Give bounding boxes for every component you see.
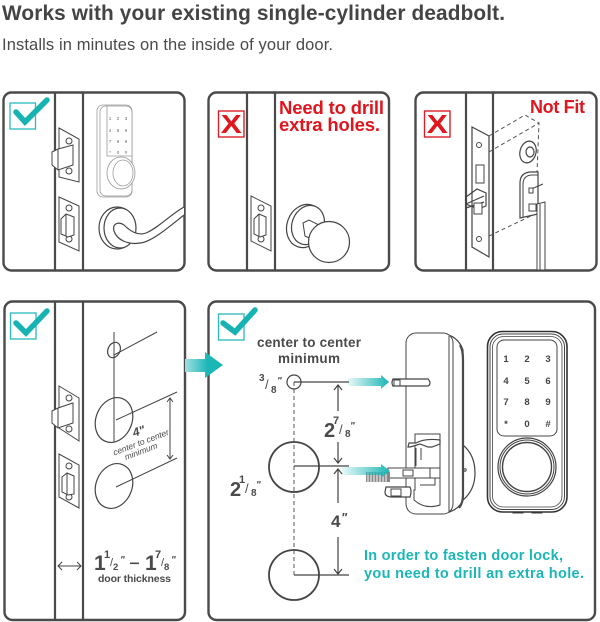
dimension labels: " xyxy=(277,376,282,387)
smart lock front: * xyxy=(504,419,508,430)
center to center heading: minimum xyxy=(278,351,340,366)
dimension labels: 7 xyxy=(333,415,339,427)
dimension labels: 8 xyxy=(251,488,257,499)
smart lock illustration: 5 xyxy=(117,128,120,133)
smart lock front: 1 xyxy=(503,354,509,365)
smart lock illustration: 6 xyxy=(125,128,128,133)
thickness value: 1 xyxy=(145,552,157,575)
dimension labels: " xyxy=(256,480,261,491)
icon: teal check xyxy=(10,311,47,339)
rotated spacing label: center to center xyxy=(112,427,171,457)
icon: teal check xyxy=(218,310,255,340)
lever handle xyxy=(99,207,184,249)
smart lock illustration: 2 xyxy=(117,116,120,121)
teal instruction text: In order to fasten door lock, xyxy=(364,548,563,564)
arrow: to detail panel xyxy=(185,352,223,378)
thickness arrow xyxy=(58,562,81,570)
smart lock illustration: 0 xyxy=(117,150,120,155)
dimension labels: 4 xyxy=(331,512,341,531)
center to center heading: center to center xyxy=(257,335,362,350)
dimension labels: " xyxy=(350,421,355,432)
icon: red x xyxy=(218,109,244,139)
subtitle: Installs in minutes on the inside of your door. xyxy=(2,36,333,54)
teal instruction text: you need to drill an extra hole. xyxy=(364,566,584,582)
icon: red x xyxy=(424,109,450,139)
dimension arrows xyxy=(334,385,342,574)
smart lock front: # xyxy=(545,419,551,430)
rotated spacing label: 4" xyxy=(130,423,147,440)
dimension labels: 8 xyxy=(271,385,277,396)
thickness value: 1 xyxy=(104,549,110,561)
panel: door thickness and hole spacing xyxy=(4,301,185,620)
hole diagram xyxy=(89,332,177,514)
smart lock front xyxy=(488,332,567,513)
dimension labels: / xyxy=(339,422,343,437)
smart lock illustration: 3 xyxy=(125,116,128,121)
smart lock front: 8 xyxy=(524,397,530,408)
warning text xyxy=(279,97,384,135)
hole spacing diagram xyxy=(269,375,349,600)
smart lock front: 0 xyxy=(524,419,530,430)
arrow: center hole xyxy=(342,464,390,478)
dimension labels: " xyxy=(341,510,348,525)
panel: mortise lock not fit xyxy=(416,92,596,270)
smart lock front: 7 xyxy=(503,397,509,408)
dimension labels: 1 xyxy=(239,474,245,486)
dimension labels: 8 xyxy=(345,429,351,440)
thickness value: " xyxy=(171,555,176,566)
thickness value xyxy=(94,549,176,575)
smart lock illustration: 7 xyxy=(109,139,112,144)
smart lock illustration: 4 xyxy=(109,128,112,133)
warning text: extra holes. xyxy=(279,114,380,135)
title: Works with your existing single-cylinder deadbolt. xyxy=(2,2,505,25)
panel: knob needs extra holes xyxy=(208,92,389,270)
smart lock front: 2 xyxy=(524,354,530,365)
icon: red x: X xyxy=(221,109,243,139)
smart lock front: 9 xyxy=(545,397,551,408)
panel: drilling detail xyxy=(208,302,595,620)
icon: teal check xyxy=(10,100,47,129)
smart lock front: 4 xyxy=(503,376,509,387)
dimension labels: / xyxy=(245,481,249,496)
dimension labels xyxy=(230,373,355,531)
thickness value: 8 xyxy=(164,562,169,573)
thickness value: 2 xyxy=(113,562,118,573)
smart lock front: 5 xyxy=(524,376,530,387)
smart lock illustration: 9 xyxy=(125,139,128,144)
thickness value: / xyxy=(161,557,165,569)
door edge hardware xyxy=(52,386,79,508)
thickness value: 1 xyxy=(94,552,106,575)
center to center heading xyxy=(257,335,362,366)
lock back side xyxy=(385,333,475,514)
warning text: Need to drill xyxy=(279,97,384,118)
not fit label: Not Fit xyxy=(530,97,585,117)
icon: red x: X xyxy=(427,109,449,139)
thickness value: / xyxy=(110,557,114,569)
smart lock illustration: 1 xyxy=(109,116,112,121)
dimension labels: / xyxy=(265,377,269,392)
door knob xyxy=(281,199,350,262)
panel: compatible lever and deadbolt xyxy=(4,92,184,270)
rotated spacing label: minimum xyxy=(123,440,159,462)
teal instruction text xyxy=(364,548,584,582)
mortise lock drawing xyxy=(466,115,545,270)
thickness value: " xyxy=(120,555,125,566)
thickness caption: door thickness xyxy=(98,573,171,585)
dimension labels: 3 xyxy=(259,373,265,384)
smart lock illustration: # xyxy=(125,150,128,155)
dimension labels: 2 xyxy=(324,420,335,442)
thickness value: 7 xyxy=(155,549,161,561)
dimension labels: 2 xyxy=(230,479,241,501)
gear bar xyxy=(366,472,390,482)
smart lock illustration: * xyxy=(109,150,111,155)
smart lock front: 6 xyxy=(545,376,551,387)
latch plate xyxy=(251,196,271,251)
smart lock illustration xyxy=(97,105,135,197)
smart lock front: 3 xyxy=(545,354,551,365)
smart lock illustration: 8 xyxy=(117,139,120,144)
door edge hardware xyxy=(52,128,79,251)
arrow: upper hole xyxy=(348,375,389,389)
